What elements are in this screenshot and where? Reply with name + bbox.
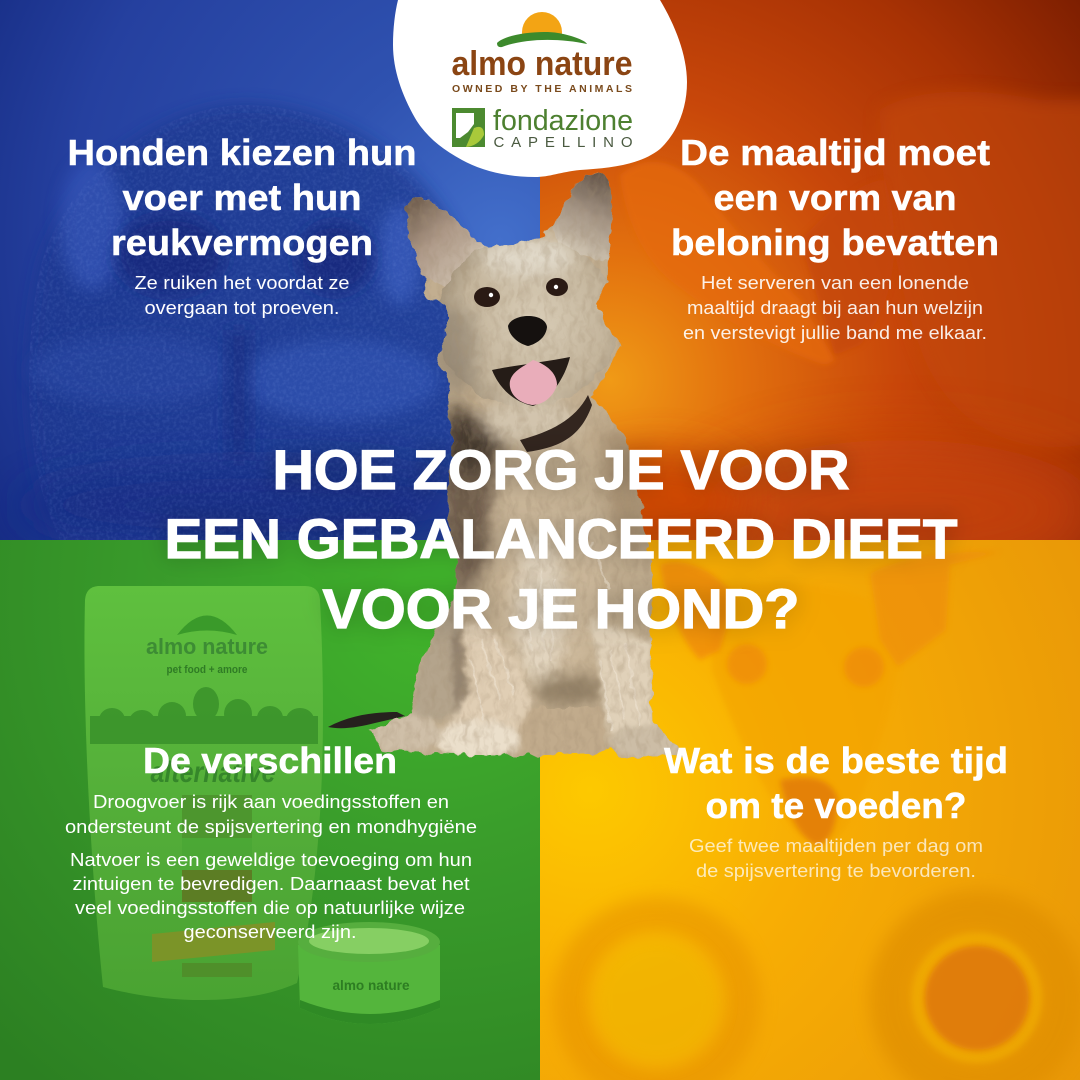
panel: blue quadrant background (0, 0, 540, 545)
text: differences: ondersteunt de spijsvertering en mondhygiëne (65, 816, 477, 837)
text: feeding time: Geef twee maaltijden per dag om (689, 835, 983, 856)
panel: orange quadrant background (540, 0, 1080, 580)
faded dog face and bowls in yellow (571, 552, 1063, 1080)
heading: reward (671, 132, 999, 263)
text: differences: zintuigen te bevredigen. Daarnaast bevat het (72, 873, 469, 894)
product: wet food can: almo nature (332, 977, 410, 993)
text: reward: maaltijd draagt bij aan hun welzijn (687, 297, 983, 318)
text: differences: Natvoer is een geweldige toevoeging om hun (70, 849, 472, 870)
logo blob (393, 0, 687, 177)
title (164, 438, 958, 640)
panel: yellow quadrant background (540, 540, 1080, 1080)
panel: smell heading and text (68, 132, 416, 318)
text: differences: geconserveerd zijn. (184, 921, 356, 942)
paws (436, 720, 520, 760)
text: reward: Het serveren van een lonende (701, 272, 969, 293)
heading: differences: De verschillen (143, 740, 397, 781)
text: feeding time: de spijsvertering te bevorderen. (696, 860, 976, 881)
almo nature logo: OWNED BY THE ANIMALS (452, 83, 632, 95)
fondazione capellino logo: fondazione (493, 105, 633, 137)
panel: green quadrant background (0, 540, 540, 1080)
product: dry food pouch (84, 586, 323, 1000)
fur noise (372, 172, 678, 756)
title: VOOR JE HOND? (322, 577, 800, 640)
product: dry food pouch: almo nature (146, 634, 268, 659)
heading: smell: Honden kiezen hun (68, 132, 416, 173)
product: wet food can (298, 922, 440, 1024)
dog mouth and tongue (492, 357, 570, 406)
dogs illustration band (90, 687, 318, 744)
terrier dog photo (328, 170, 700, 770)
faded hand and dog photo in orange (570, 92, 1080, 580)
text: smell: overgaan tot proeven. (144, 297, 340, 318)
text: smell (134, 272, 350, 318)
tail (328, 712, 405, 728)
fondazione capellino logo (452, 105, 633, 151)
head fill (435, 238, 619, 406)
heading: feeding time: Wat is de beste tijd (664, 740, 1008, 781)
fondazione capellino logo: CAPELLINO (494, 134, 632, 151)
heading: reward: De maaltijd moet (680, 132, 990, 173)
ears (404, 197, 490, 290)
belly (515, 708, 605, 758)
dog nose (508, 316, 547, 346)
heading: smell: reukvermogen (111, 222, 373, 263)
text: reward: en verstevigt jullie band me elkaar. (683, 322, 987, 343)
title: HOE ZORG JE VOOR (272, 438, 850, 501)
front legs (445, 623, 533, 730)
heading: feeding time (664, 740, 1008, 826)
product: dry food pouch: pet food + amore (166, 664, 248, 676)
dog eyes (474, 278, 568, 307)
almo nature logo (452, 12, 632, 95)
heading: reward: beloning bevatten (671, 222, 999, 263)
almo nature logo: almo nature (452, 45, 632, 83)
dog collar (520, 395, 592, 452)
heading: feeding time: om te voeden? (706, 785, 966, 826)
text: reward (683, 272, 987, 343)
panel: differences text (65, 740, 477, 942)
heading: smell (68, 132, 416, 263)
title: EEN GEBALANCEERD DIEET (164, 507, 958, 570)
fur strokes (470, 540, 640, 730)
text: differences: Droogvoer is rijk aan voedingsstoffen en (93, 791, 449, 812)
heading: smell: voer met hun (122, 177, 362, 218)
heading: reward: een vorm van (714, 177, 956, 218)
faded dog snout photo in blue (29, 102, 454, 540)
panel: feeding time text (664, 740, 1008, 881)
neck dark (448, 400, 510, 470)
rear haunch (412, 611, 456, 720)
product: dry food pouch: alternative (150, 756, 276, 789)
text: smell: Ze ruiken het voordat ze (134, 272, 350, 293)
chest highlight (500, 480, 610, 690)
shadow between legs (532, 675, 604, 705)
text: differences (65, 791, 477, 942)
dark shoulder shading (440, 420, 500, 600)
dog body and head (368, 172, 682, 759)
panel: reward heading and text (671, 132, 999, 343)
text: differences: veel voedingsstoffen die op natuurlijke wijze (75, 897, 465, 918)
text: feeding time (689, 835, 983, 881)
